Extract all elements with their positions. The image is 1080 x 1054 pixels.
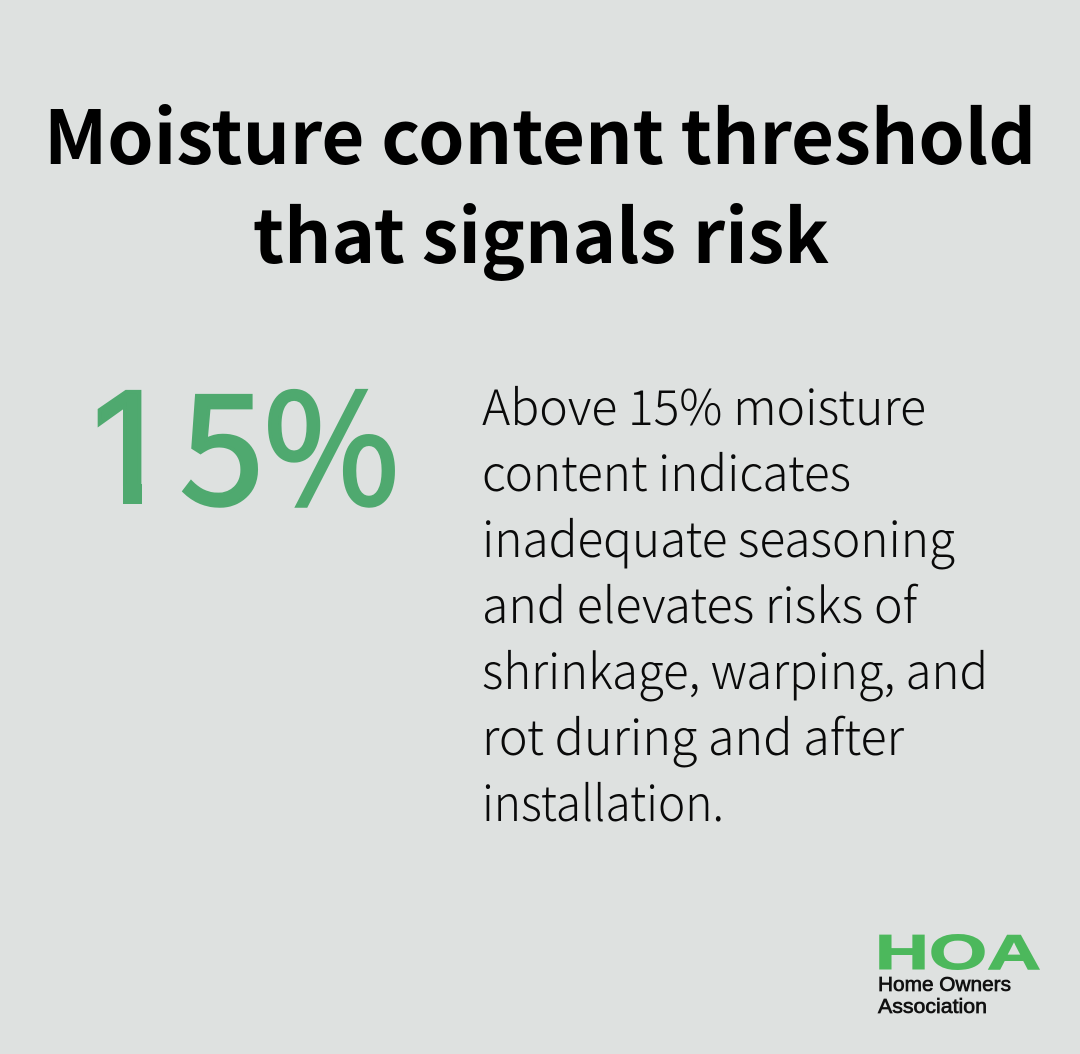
description text block: shrinkage, warping, and (482, 633, 988, 704)
big stat: 15% (98, 388, 395, 508)
logo: Home Owners Association: Home Owners (878, 974, 1011, 996)
logo: Home Owners Association: HOA (875, 926, 1041, 980)
description text block: content indicates (482, 435, 851, 506)
title: Moisture content threshold (44, 79, 1036, 186)
description text block (482, 369, 988, 836)
description text block: inadequate seasoning (482, 501, 955, 572)
description text block: and elevates risks of (482, 567, 918, 638)
logo: Home Owners Association (875, 926, 1041, 1018)
big stat: 15%: 5 (180, 328, 264, 548)
description text block: Above 15% moisture (482, 369, 926, 440)
big stat: 15%: 1 (84, 356, 175, 539)
title: that signals risk (253, 178, 829, 285)
description text block: rot during and after (482, 699, 904, 770)
description text block: installation. (482, 765, 724, 836)
title (44, 79, 1036, 285)
logo: Home Owners Association: Association (878, 996, 987, 1018)
big stat: 15%: % (264, 328, 399, 548)
